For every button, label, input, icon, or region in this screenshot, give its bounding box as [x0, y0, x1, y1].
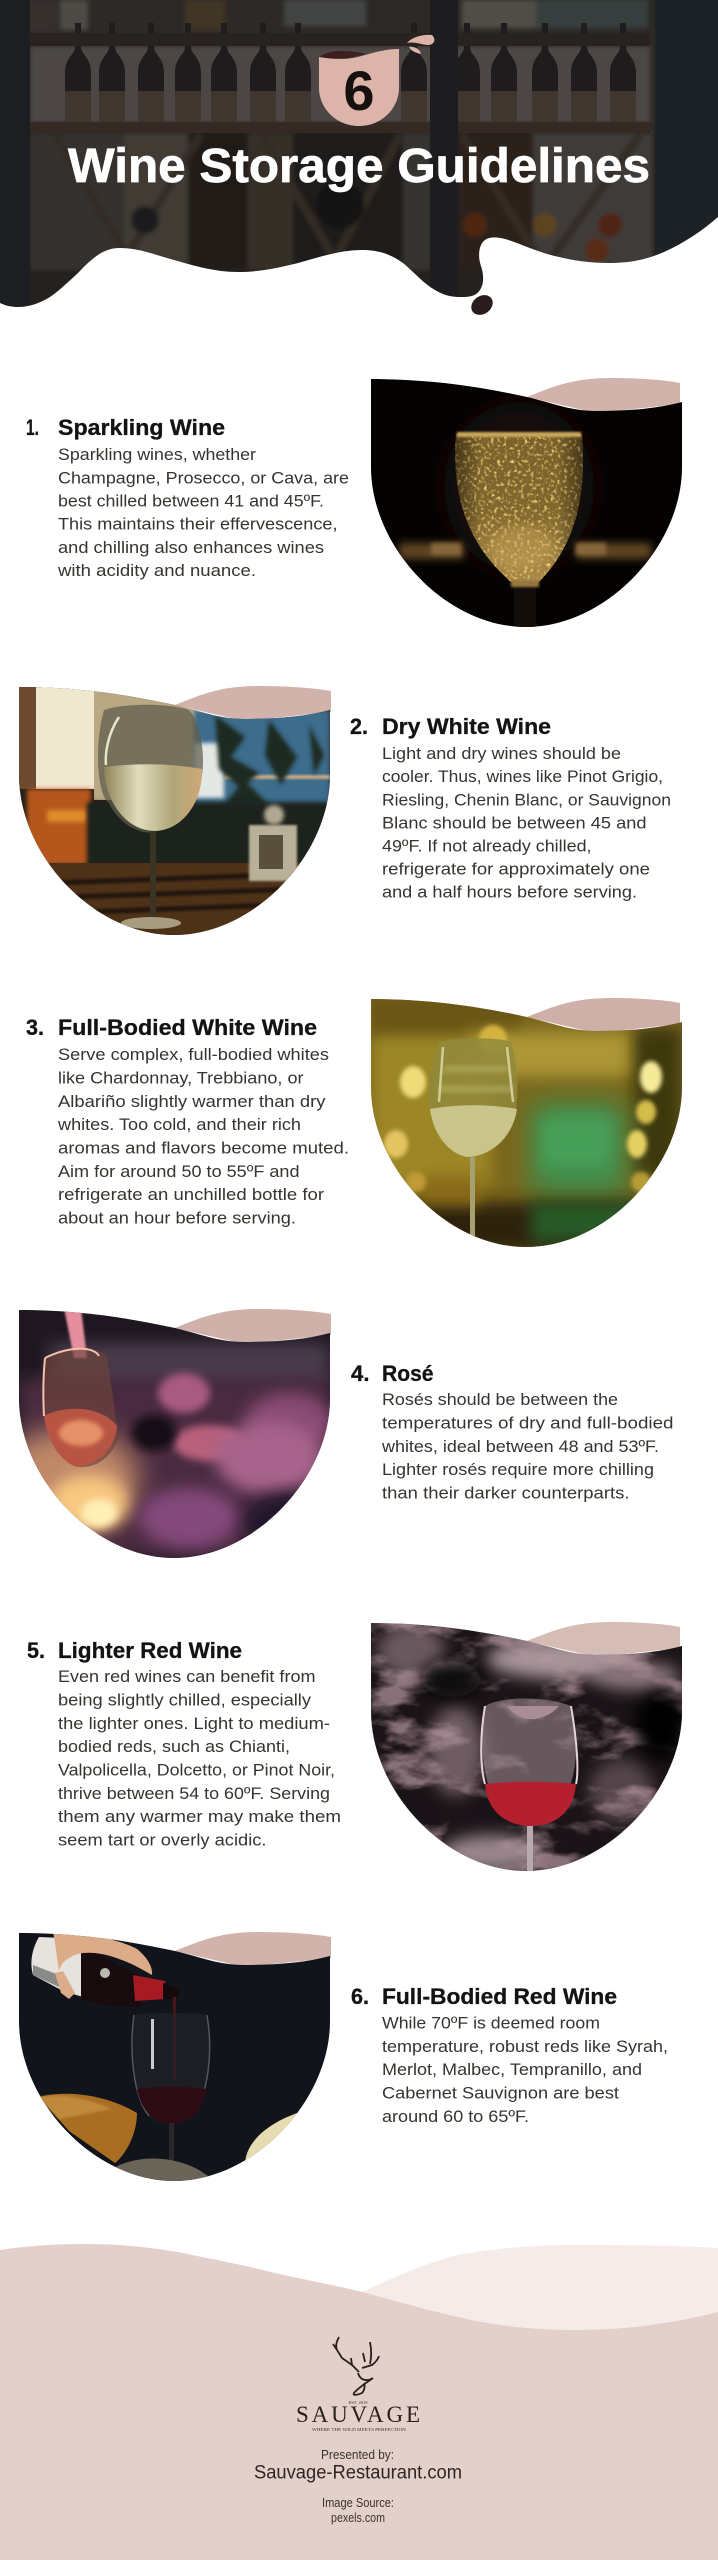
- lighter red wine text: Valpolicella, Dolcetto, or Pinot Noir,: [58, 1762, 335, 1780]
- footer light wave: [362, 2245, 718, 2340]
- section 1: sparkling wine: [26, 377, 682, 628]
- photo: pouring red wine: [19, 1931, 331, 2183]
- sparkling wine text: Sparkling wines, whether: [58, 446, 257, 464]
- full-bodied white wine text: Aim for around 50 to 55ºF and: [58, 1163, 300, 1181]
- dry white wine text: and a half hours before serving.: [382, 884, 637, 902]
- logo: sauvage antlers and wordmark: WHERE THE WILD MEETS PERFECTION: [312, 2427, 407, 2432]
- dry white wine heading: Dry White Wine: [382, 714, 551, 739]
- photo: sparkling wine glass: [371, 377, 682, 628]
- full-bodied red wine text: [382, 2014, 668, 2126]
- full-bodied white wine text: [57, 1046, 349, 1228]
- full-bodied red wine text: around 60 to 65ºF.: [382, 2108, 529, 2126]
- website: Sauvage-Restaurant.com: [254, 2462, 462, 2484]
- lighter red wine text: being slightly chilled, especially: [58, 1692, 312, 1710]
- full-bodied white wine heading: 3.: [26, 1015, 44, 1040]
- rose text: Rosés should be between the: [382, 1391, 618, 1409]
- lighter red wine heading: 5.: [27, 1638, 45, 1663]
- splash droplet: [467, 291, 497, 319]
- section 2: dry white wine: [19, 685, 671, 935]
- rose heading: [351, 1361, 434, 1386]
- full-bodied red wine text: While 70ºF is deemed room: [382, 2014, 600, 2032]
- dry white wine text: Blanc should be between 45 and: [382, 814, 646, 832]
- full-bodied red wine text: Merlot, Malbec, Tempranillo, and: [382, 2061, 642, 2079]
- section 6: full-bodied red wine: [19, 1931, 668, 2183]
- full-bodied white wine text: refrigerate an unchilled bottle for: [58, 1186, 325, 1204]
- full-bodied red wine text: temperature, robust reds like Syrah,: [382, 2038, 668, 2056]
- photo: full-bodied white wine glass: [371, 997, 682, 1252]
- dry white wine text: cooler. Thus, wines like Pinot Grigio,: [382, 768, 663, 786]
- image source label: Image Source:: [322, 2495, 394, 2510]
- rose heading: Rosé: [382, 1361, 434, 1386]
- section 3: full-bodied white wine: [26, 997, 682, 1252]
- photo: rose wine glass: [0, 1308, 334, 1558]
- number badge: wine cup with 6: [319, 35, 434, 126]
- rose text: Lighter rosés require more chilling: [382, 1461, 654, 1479]
- sparkling wine text: and chilling also enhances wines: [58, 539, 324, 557]
- dry white wine text: 49ºF. If not already chilled,: [382, 838, 592, 856]
- lighter red wine text: seem tart or overly acidic.: [58, 1832, 266, 1850]
- number badge: wine cup with 6: 6: [343, 59, 375, 122]
- lighter red wine text: thrive between 54 to 60ºF. Serving: [58, 1785, 330, 1803]
- section 5: lighter red wine: [27, 1621, 687, 1872]
- image source value: pexels.com: [331, 2510, 385, 2525]
- sparkling wine text: with acidity and nuance.: [57, 562, 256, 580]
- sparkling wine text: This maintains their effervescence,: [58, 516, 338, 534]
- lighter red wine text: [58, 1668, 341, 1850]
- footer panel: [0, 2244, 718, 2560]
- dry white wine text: refrigerate for approximately one: [382, 860, 650, 878]
- lighter red wine text: Even red wines can benefit from: [58, 1668, 316, 1686]
- header photo banner: [0, 0, 718, 320]
- sparkling wine text: best chilled between 41 and 45ºF.: [58, 492, 324, 510]
- sparkling wine heading: Sparkling Wine: [58, 415, 225, 440]
- lighter red wine text: the lighter ones. Light to medium-: [58, 1715, 330, 1733]
- rose text: whites, ideal between 48 and 53ºF.: [381, 1438, 659, 1456]
- rose text: [381, 1391, 674, 1502]
- full-bodied white wine text: Albariño slightly warmer than dry: [58, 1093, 326, 1111]
- dry white wine text: [382, 745, 671, 902]
- rose text: than their darker counterparts.: [382, 1484, 630, 1502]
- dry white wine text: Light and dry wines should be: [382, 745, 621, 763]
- full-bodied white wine text: about an hour before serving.: [58, 1210, 296, 1228]
- full-bodied white wine text: aromas and flavors become muted.: [58, 1140, 349, 1158]
- white wavy edge of header: [0, 217, 718, 330]
- full-bodied red wine heading: Full-Bodied Red Wine: [382, 1984, 617, 2009]
- sparkling wine text: Champagne, Prosecco, or Cava, are: [58, 470, 349, 488]
- logo: sauvage antlers and wordmark: SAUVAGE: [296, 2402, 420, 2427]
- lighter red wine text: them any warmer may make them: [58, 1808, 341, 1826]
- rose heading: 4.: [351, 1361, 370, 1386]
- footer pink wave: [0, 2244, 718, 2560]
- dry white wine text: Riesling, Chenin Blanc, or Sauvignon: [382, 792, 671, 810]
- full-bodied white wine text: like Chardonnay, Trebbiano, or: [58, 1070, 304, 1088]
- lighter red wine heading: Lighter Red Wine: [58, 1638, 242, 1663]
- sparkling wine heading: 1.: [26, 415, 39, 440]
- dry white wine heading: 2.: [350, 714, 368, 739]
- title: Wine Storage Guidelines: [68, 140, 650, 193]
- photo: red wine glass in smoke: [371, 1621, 687, 1872]
- full-bodied white wine text: whites. Too cold, and their rich: [57, 1116, 301, 1134]
- photo: white wine glass: [19, 685, 331, 935]
- section 4: rose: [0, 1308, 674, 1558]
- full-bodied white wine heading: Full-Bodied White Wine: [58, 1015, 317, 1040]
- logo: sauvage antlers and wordmark: EST. 2019: [349, 2400, 368, 2405]
- rose text: temperatures of dry and full-bodied: [382, 1414, 674, 1432]
- sparkling wine text: [57, 446, 349, 580]
- lighter red wine text: bodied reds, such as Chianti,: [58, 1738, 290, 1756]
- full-bodied red wine text: Cabernet Sauvignon are best: [382, 2084, 619, 2102]
- full-bodied red wine heading: 6.: [351, 1984, 369, 2009]
- presented by: Presented by:: [321, 2447, 394, 2462]
- logo: sauvage antlers and wordmark: [296, 2337, 420, 2432]
- full-bodied white wine text: Serve complex, full-bodied whites: [58, 1046, 329, 1064]
